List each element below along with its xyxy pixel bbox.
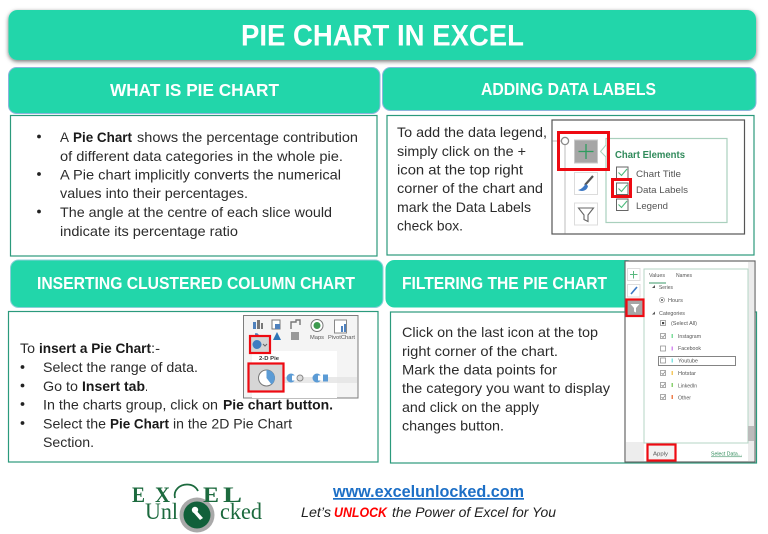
text block: filtering the pie chart: the category you want to display xyxy=(402,380,610,396)
red highlight: filter button xyxy=(626,300,644,316)
text block: adding data labels: To add the data legend, xyxy=(397,124,547,140)
2-D pie dropdown: 2-D Pie xyxy=(259,356,279,362)
text block: adding data labels: mark the Data Labels xyxy=(397,199,531,215)
text block: what is pie chart xyxy=(10,116,377,256)
heading: what is pie chart: WHAT IS PIE CHART xyxy=(110,80,279,100)
text block: filtering the pie chart: right corner of the chart. xyxy=(402,343,558,359)
panel: adding data labels xyxy=(382,68,756,255)
text block: filtering the pie chart xyxy=(390,312,756,463)
text block: inserting a pie chart: . xyxy=(145,378,148,394)
chart elements flyout: Data Labels xyxy=(636,185,688,196)
text block: inserting a pie chart xyxy=(8,312,378,462)
text block: what is pie chart: of different data categories in the whole pie. xyxy=(60,148,343,164)
panel: inserting clustered column chart xyxy=(8,260,383,462)
tagline xyxy=(301,504,556,520)
icon: plus button xyxy=(574,140,598,163)
text block: inserting a pie chart: Pie chart button. xyxy=(223,396,333,412)
text block: what is pie chart: values into their percentages. xyxy=(60,185,248,201)
logo: excel unlocked: X xyxy=(155,482,170,507)
filter list: Instagram xyxy=(678,334,701,340)
text block: inserting a pie chart: in the 2D Pie Chart xyxy=(173,416,292,432)
text block: inserting a pie chart: To xyxy=(20,340,35,356)
red highlight: data labels checkbox xyxy=(612,180,630,196)
logo: excel unlocked: L xyxy=(223,482,242,507)
screenshot: chart filter pane xyxy=(625,261,755,462)
text block: inserting a pie chart: In the charts group, click on xyxy=(43,396,218,412)
text block: adding data labels: simply click on the + xyxy=(397,143,526,159)
title banner xyxy=(8,10,756,60)
text block: what is pie chart: shows the percentage contribution xyxy=(137,129,358,145)
chart elements flyout: Chart Elements xyxy=(615,150,685,161)
text block: what is pie chart: indicate its percentage ratio xyxy=(60,223,238,239)
website link: www.excelunlocked.com xyxy=(332,482,524,501)
tagline: UNLOCK xyxy=(334,504,388,520)
filter list: Names xyxy=(676,273,692,279)
text block: what is pie chart: A xyxy=(60,129,70,145)
text block: what is pie chart: The angle at the centre of each slice would xyxy=(60,204,332,220)
text block: what is pie chart: Pie Chart xyxy=(73,129,132,145)
text block: inserting a pie chart: insert a Pie Chart xyxy=(39,340,151,356)
text block: inserting a pie chart: Select the range of data. xyxy=(43,359,198,375)
chart elements flyout: Legend xyxy=(636,201,668,212)
tagline: Let’s xyxy=(301,504,331,520)
text block: filtering the pie chart: changes button. xyxy=(402,418,504,434)
text block: inserting a pie chart: Go to xyxy=(43,378,78,394)
text block: what is pie chart: A Pie chart implicitly converts the numerical xyxy=(60,166,341,182)
heading: adding data labels xyxy=(382,68,756,110)
filter list: Series xyxy=(659,285,673,291)
heading: adding data labels: ADDING DATA LABELS xyxy=(481,79,656,99)
text block: inserting a pie chart: Select the xyxy=(43,416,106,432)
icon: plus button xyxy=(628,268,640,280)
text block: adding data labels: check box. xyxy=(397,218,463,234)
text block: filtering the pie chart: Click on the last icon at the top xyxy=(402,324,598,340)
chart elements flyout xyxy=(600,138,727,222)
icon: brush button xyxy=(574,172,598,194)
text block: adding data labels xyxy=(387,116,754,255)
chart elements flyout: Chart Title xyxy=(636,169,681,180)
filter list: LinkedIn xyxy=(678,384,697,390)
text block: filtering the pie chart: Mark the data points for xyxy=(402,362,557,378)
filter list xyxy=(649,273,736,402)
filter list: Other xyxy=(678,396,691,402)
red highlight: 2-D pie option xyxy=(248,364,284,392)
screenshot: insert chart ribbon: PivotChart xyxy=(328,335,356,341)
ribbon icons xyxy=(253,320,346,340)
filter list: (Select All) xyxy=(671,321,697,327)
pie button in ribbon xyxy=(251,337,269,352)
text block: inserting a pie chart: Insert tab xyxy=(82,378,145,394)
logo: excel unlocked: E xyxy=(132,482,145,507)
filter list: Youtube xyxy=(678,358,698,364)
heading: filtering the pie chart: FILTERING THE PIE CHART xyxy=(402,273,607,293)
red highlight: pie chart button xyxy=(250,336,270,353)
text block: filtering the pie chart: and click on the apply xyxy=(402,399,539,415)
heading: inserting clustered column chart xyxy=(10,260,383,308)
logo: excel unlocked: Unl xyxy=(145,499,178,524)
tagline: the Power of Excel for You xyxy=(392,504,556,520)
screenshot: chart elements menu xyxy=(552,120,744,234)
filter list: Categories xyxy=(659,311,686,317)
filter list: Hotstar xyxy=(678,371,696,377)
title banner: PIE CHART IN EXCEL xyxy=(241,20,524,52)
filter list: Facebook xyxy=(678,346,702,352)
text block: adding data labels: corner of the chart and xyxy=(397,180,543,196)
apply button xyxy=(648,444,676,460)
apply button: Apply xyxy=(653,452,669,458)
red highlight: plus button xyxy=(558,132,608,170)
icon: filter button xyxy=(627,300,643,316)
filter list: Hours xyxy=(668,298,684,304)
logo: excel unlocked xyxy=(132,482,262,532)
heading: what is pie chart xyxy=(8,68,380,114)
panel: what is pie chart xyxy=(8,68,380,256)
screenshot: insert chart ribbon xyxy=(244,316,358,398)
select data link: Select Data... xyxy=(711,452,742,458)
icon: filter button xyxy=(574,203,598,225)
text block: inserting a pie chart: Pie Chart xyxy=(110,416,169,432)
heading: inserting clustered column chart: INSERTING CLUSTERED COLUMN CHART xyxy=(37,273,355,293)
text block: adding data labels: icon at the top right xyxy=(397,162,523,178)
screenshot: insert chart ribbon: Maps xyxy=(310,335,325,341)
panel: filtering the pie chart xyxy=(386,260,756,463)
text block: inserting a pie chart: :- xyxy=(151,340,160,356)
heading: filtering the pie chart xyxy=(386,260,636,308)
logo: excel unlocked: E xyxy=(203,482,219,507)
filter list: Values xyxy=(649,273,666,279)
icon: brush button xyxy=(628,284,640,297)
logo: excel unlocked: cked xyxy=(220,499,262,524)
text block: inserting a pie chart: Section. xyxy=(43,434,94,450)
